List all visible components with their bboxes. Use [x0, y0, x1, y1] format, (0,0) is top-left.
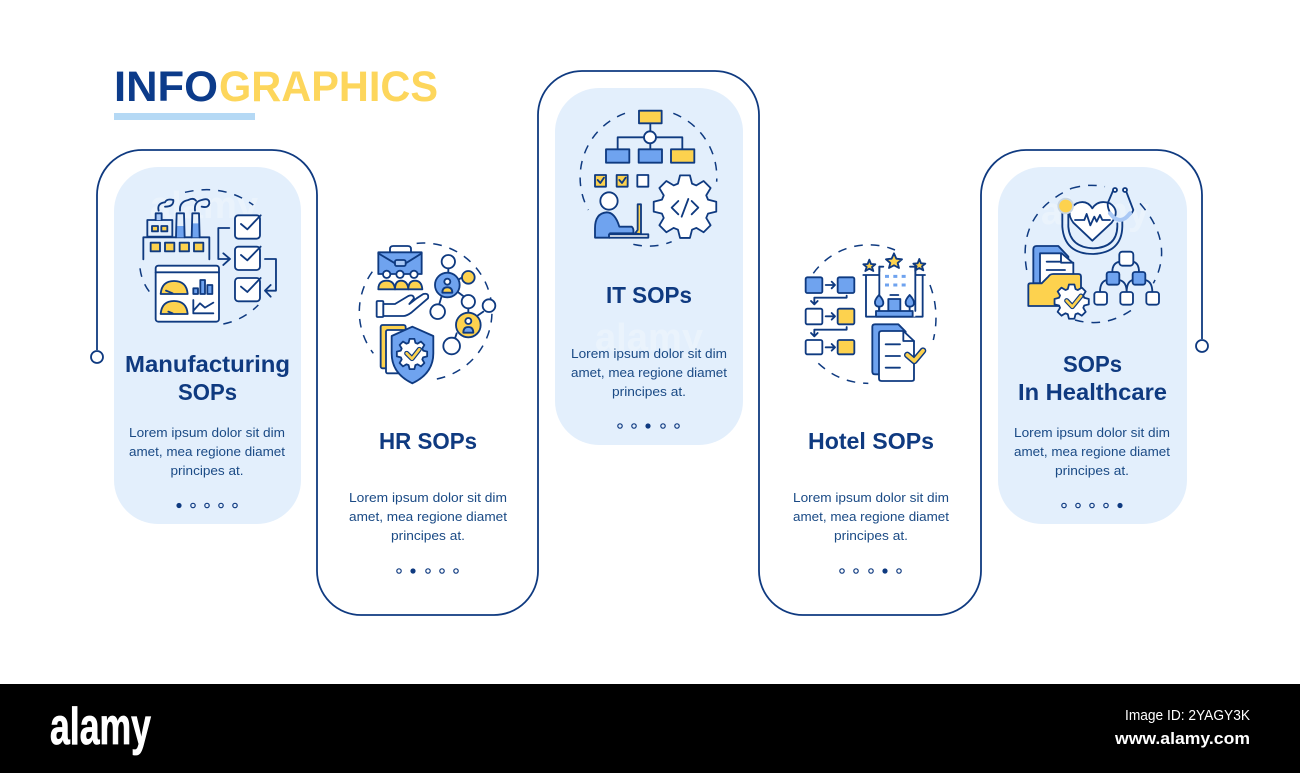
pagination dots: [1062, 503, 1123, 508]
footer url: www.alamy.com: [1114, 729, 1250, 748]
body text: amet, mea regione diamet: [793, 509, 949, 524]
continuous outline connecting the panels: [91, 71, 1208, 615]
body text: principes at.: [834, 528, 908, 543]
icon: factory, dashboard and checklist: [140, 190, 276, 324]
body text: amet, mea regione diamet: [129, 444, 285, 459]
body text: principes at.: [170, 463, 244, 478]
body text: Lorem ipsum dolor sit dim: [349, 490, 507, 505]
pagination dots: [840, 568, 901, 574]
panel: Hotel SOPs: [793, 245, 949, 574]
body text: amet, mea regione diamet: [571, 365, 727, 380]
watermark text: alamy: [150, 185, 258, 227]
panel background: IT: [555, 88, 743, 445]
heading: In Healthcare: [1018, 379, 1167, 405]
panel background: healthcare: [998, 167, 1187, 524]
title: GRAPHICS: [219, 63, 438, 111]
watermark text: [150, 185, 1149, 359]
body text: [349, 490, 507, 543]
body text: Lorem ipsum dolor sit dim: [129, 425, 285, 440]
heading: [125, 351, 290, 405]
panel: HR SOPs: [349, 243, 507, 574]
heading: SOPs: [1063, 351, 1122, 377]
heading: SOPs: [178, 379, 237, 405]
footer logo: alamy: [50, 698, 151, 756]
heading: IT SOPs: [606, 282, 692, 308]
pagination dots: [397, 568, 458, 574]
panel background: manufacturing: [114, 167, 301, 524]
body text: Lorem ipsum dolor sit dim: [793, 490, 949, 505]
panel: Manufacturing SOPs: [125, 190, 290, 508]
body text: Lorem ipsum dolor sit dim: [1014, 425, 1170, 440]
icon: HR team, network and shield: [359, 243, 495, 383]
watermark text: alamy: [1041, 191, 1149, 233]
icon: heart, stethoscope, folder and hierarchy: [1025, 185, 1162, 323]
pagination dots: [618, 423, 679, 429]
body text: amet, mea regione diamet: [1014, 444, 1170, 459]
heading: [1018, 351, 1167, 405]
body text: Lorem ipsum dolor sit dim: [571, 346, 727, 361]
body text: [129, 425, 285, 478]
body text: [1014, 425, 1170, 478]
panel: IT SOPs: [571, 111, 727, 429]
title: [114, 63, 438, 111]
body text: principes at.: [1055, 463, 1129, 478]
icon: process flow, hotel and document: [806, 245, 936, 383]
body text: [571, 346, 727, 399]
watermark text: alamy: [595, 317, 703, 359]
pagination dots: [176, 503, 237, 508]
footer image id: Image ID: 2YAGY3K: [1125, 708, 1250, 724]
title underline: [114, 113, 255, 120]
title: INFO: [114, 63, 218, 111]
body text: [793, 490, 949, 543]
body text: amet, mea regione diamet: [349, 509, 507, 524]
heading: Hotel SOPs: [808, 428, 934, 454]
panel: SOPs In Healthcare: [1014, 185, 1170, 508]
heading: HR SOPs: [379, 428, 477, 454]
icon: org chart, programmer and code gear: [580, 111, 717, 246]
footer bar: [0, 684, 1300, 773]
body text: principes at.: [391, 528, 465, 543]
body text: principes at.: [612, 384, 686, 399]
heading: Manufacturing: [125, 351, 290, 377]
